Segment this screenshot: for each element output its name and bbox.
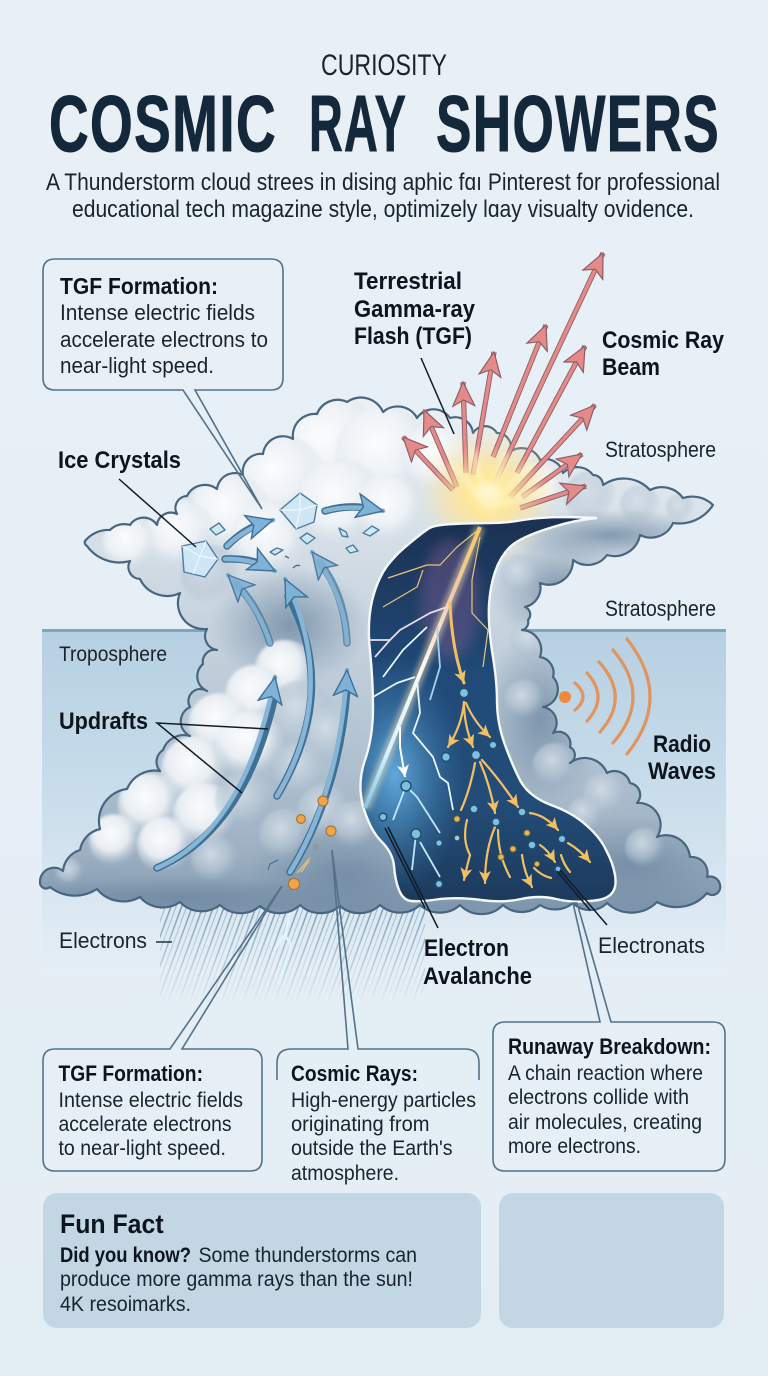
callout: runaway breakdown: electrons collide with (508, 1086, 689, 1109)
callout: runaway breakdown: Runaway Breakdown: (508, 1034, 711, 1059)
label: TGF formation callout: Intense electric fields (60, 300, 255, 325)
upper left puffs (103, 412, 456, 597)
panel: fun fact: Did you know? (60, 1244, 191, 1267)
label: electron avalanche (385, 827, 532, 990)
flash core over the ray bases (430, 444, 548, 540)
icon: radio waves (559, 639, 650, 754)
label: ice crystals (58, 447, 196, 547)
callout: TGF formation lower: TGF Formation: (58, 1061, 203, 1086)
callout: TGF formation lower (43, 886, 282, 1171)
callout: cosmic rays (277, 850, 479, 1185)
label: radio waves: Waves (648, 758, 716, 785)
lower mound (260, 785, 371, 854)
dark storm interior cutaway (359, 516, 617, 903)
label: TGF formation callout: TGF Formation: (60, 273, 218, 299)
callout: cosmic rays: High-energy particles (291, 1089, 476, 1112)
label: electronats: Electronats (598, 933, 705, 958)
callout: runaway breakdown: A chain reaction where (508, 1062, 703, 1085)
label: cosmic ray beam (602, 327, 725, 381)
mid puffs (56, 640, 360, 886)
callout: TGF formation lower: to near-light speed. (58, 1137, 226, 1160)
icon: ice crystals (182, 493, 379, 577)
anvil puffs (512, 462, 694, 525)
label: terrestrial gamma-ray flash: Terrestrial (354, 268, 462, 295)
crystal upper (280, 493, 317, 529)
title block (46, 49, 720, 223)
orange charged particles (268, 796, 336, 890)
rain below the cloud (160, 905, 425, 998)
callout: runaway breakdown (493, 903, 725, 1171)
crystal left (182, 541, 218, 577)
callout: cosmic rays: atmosphere. (291, 1162, 399, 1185)
label: troposphere: Troposphere (59, 643, 167, 666)
label: TGF formation callout: near-light speed. (60, 353, 214, 378)
panel: empty side card (499, 1193, 724, 1328)
label: electron avalanche: Avalanche (423, 963, 532, 990)
lightning (365, 527, 488, 877)
kicker: curiosity: CURIOSITY (321, 49, 447, 82)
panel: fun fact (43, 1193, 481, 1328)
label: terrestrial gamma-ray flash (354, 268, 476, 434)
gamma-ray flash glow (416, 425, 560, 565)
label: terrestrial gamma-ray flash: Flash (TGF) (354, 323, 472, 350)
panel: fun fact: produce more gamma rays than the sun! (60, 1268, 413, 1291)
callout: cosmic rays: Cosmic Rays: (291, 1061, 418, 1086)
label: TGF formation callout: accelerate electrons to (60, 327, 268, 352)
panel: fun fact: 4K resoimarks. (60, 1293, 191, 1316)
panel: fun fact: Some thunderstorms can (198, 1244, 417, 1267)
label: electrons: Electrons (59, 928, 147, 953)
label: terrestrial gamma-ray flash: Gamma-ray (354, 296, 476, 323)
label: TGF formation callout (43, 259, 283, 509)
right flank shading and puffs (497, 511, 706, 893)
subtitle: educational tech magazine style, optimizely lɑay visualty ovidence. (72, 196, 694, 223)
callout: cosmic rays: outside the Earth's (291, 1137, 452, 1160)
label: ice crystals: Ice Crystals (58, 447, 181, 474)
callout: runaway breakdown: more electrons. (508, 1135, 641, 1158)
main title: COSMIC (49, 79, 277, 168)
label: radio waves (648, 731, 716, 785)
updraft arrows (157, 507, 383, 872)
label: radio waves: Radio (653, 731, 711, 758)
main title: RAY (309, 79, 407, 168)
label: electron avalanche: Electron (424, 935, 509, 962)
storm cloud (38, 396, 722, 916)
label: cosmic ray beam: Cosmic Ray (602, 327, 725, 354)
label: electronats (557, 870, 705, 958)
subtitle (46, 169, 720, 223)
panel: troposphere band (42, 629, 726, 975)
callout: TGF formation lower: accelerate electrons (58, 1113, 232, 1136)
label: updrafts: Updrafts (59, 708, 148, 735)
callout: cosmic rays: originating from (291, 1113, 430, 1136)
callout: runaway breakdown: air molecules, creating (508, 1111, 702, 1134)
electron avalanche arrows and particles (379, 603, 590, 888)
label: stratosphere upper: Stratosphere (605, 437, 716, 462)
cosmic ray beam arrows (403, 253, 603, 508)
main title (49, 79, 720, 168)
label: cosmic ray beam: Beam (602, 354, 660, 381)
callout: TGF formation lower: Intense electric fields (58, 1089, 243, 1112)
label: updrafts (59, 708, 268, 793)
label: stratosphere lower: Stratosphere (605, 596, 716, 621)
panel: fun fact: Fun Fact (60, 1209, 164, 1239)
